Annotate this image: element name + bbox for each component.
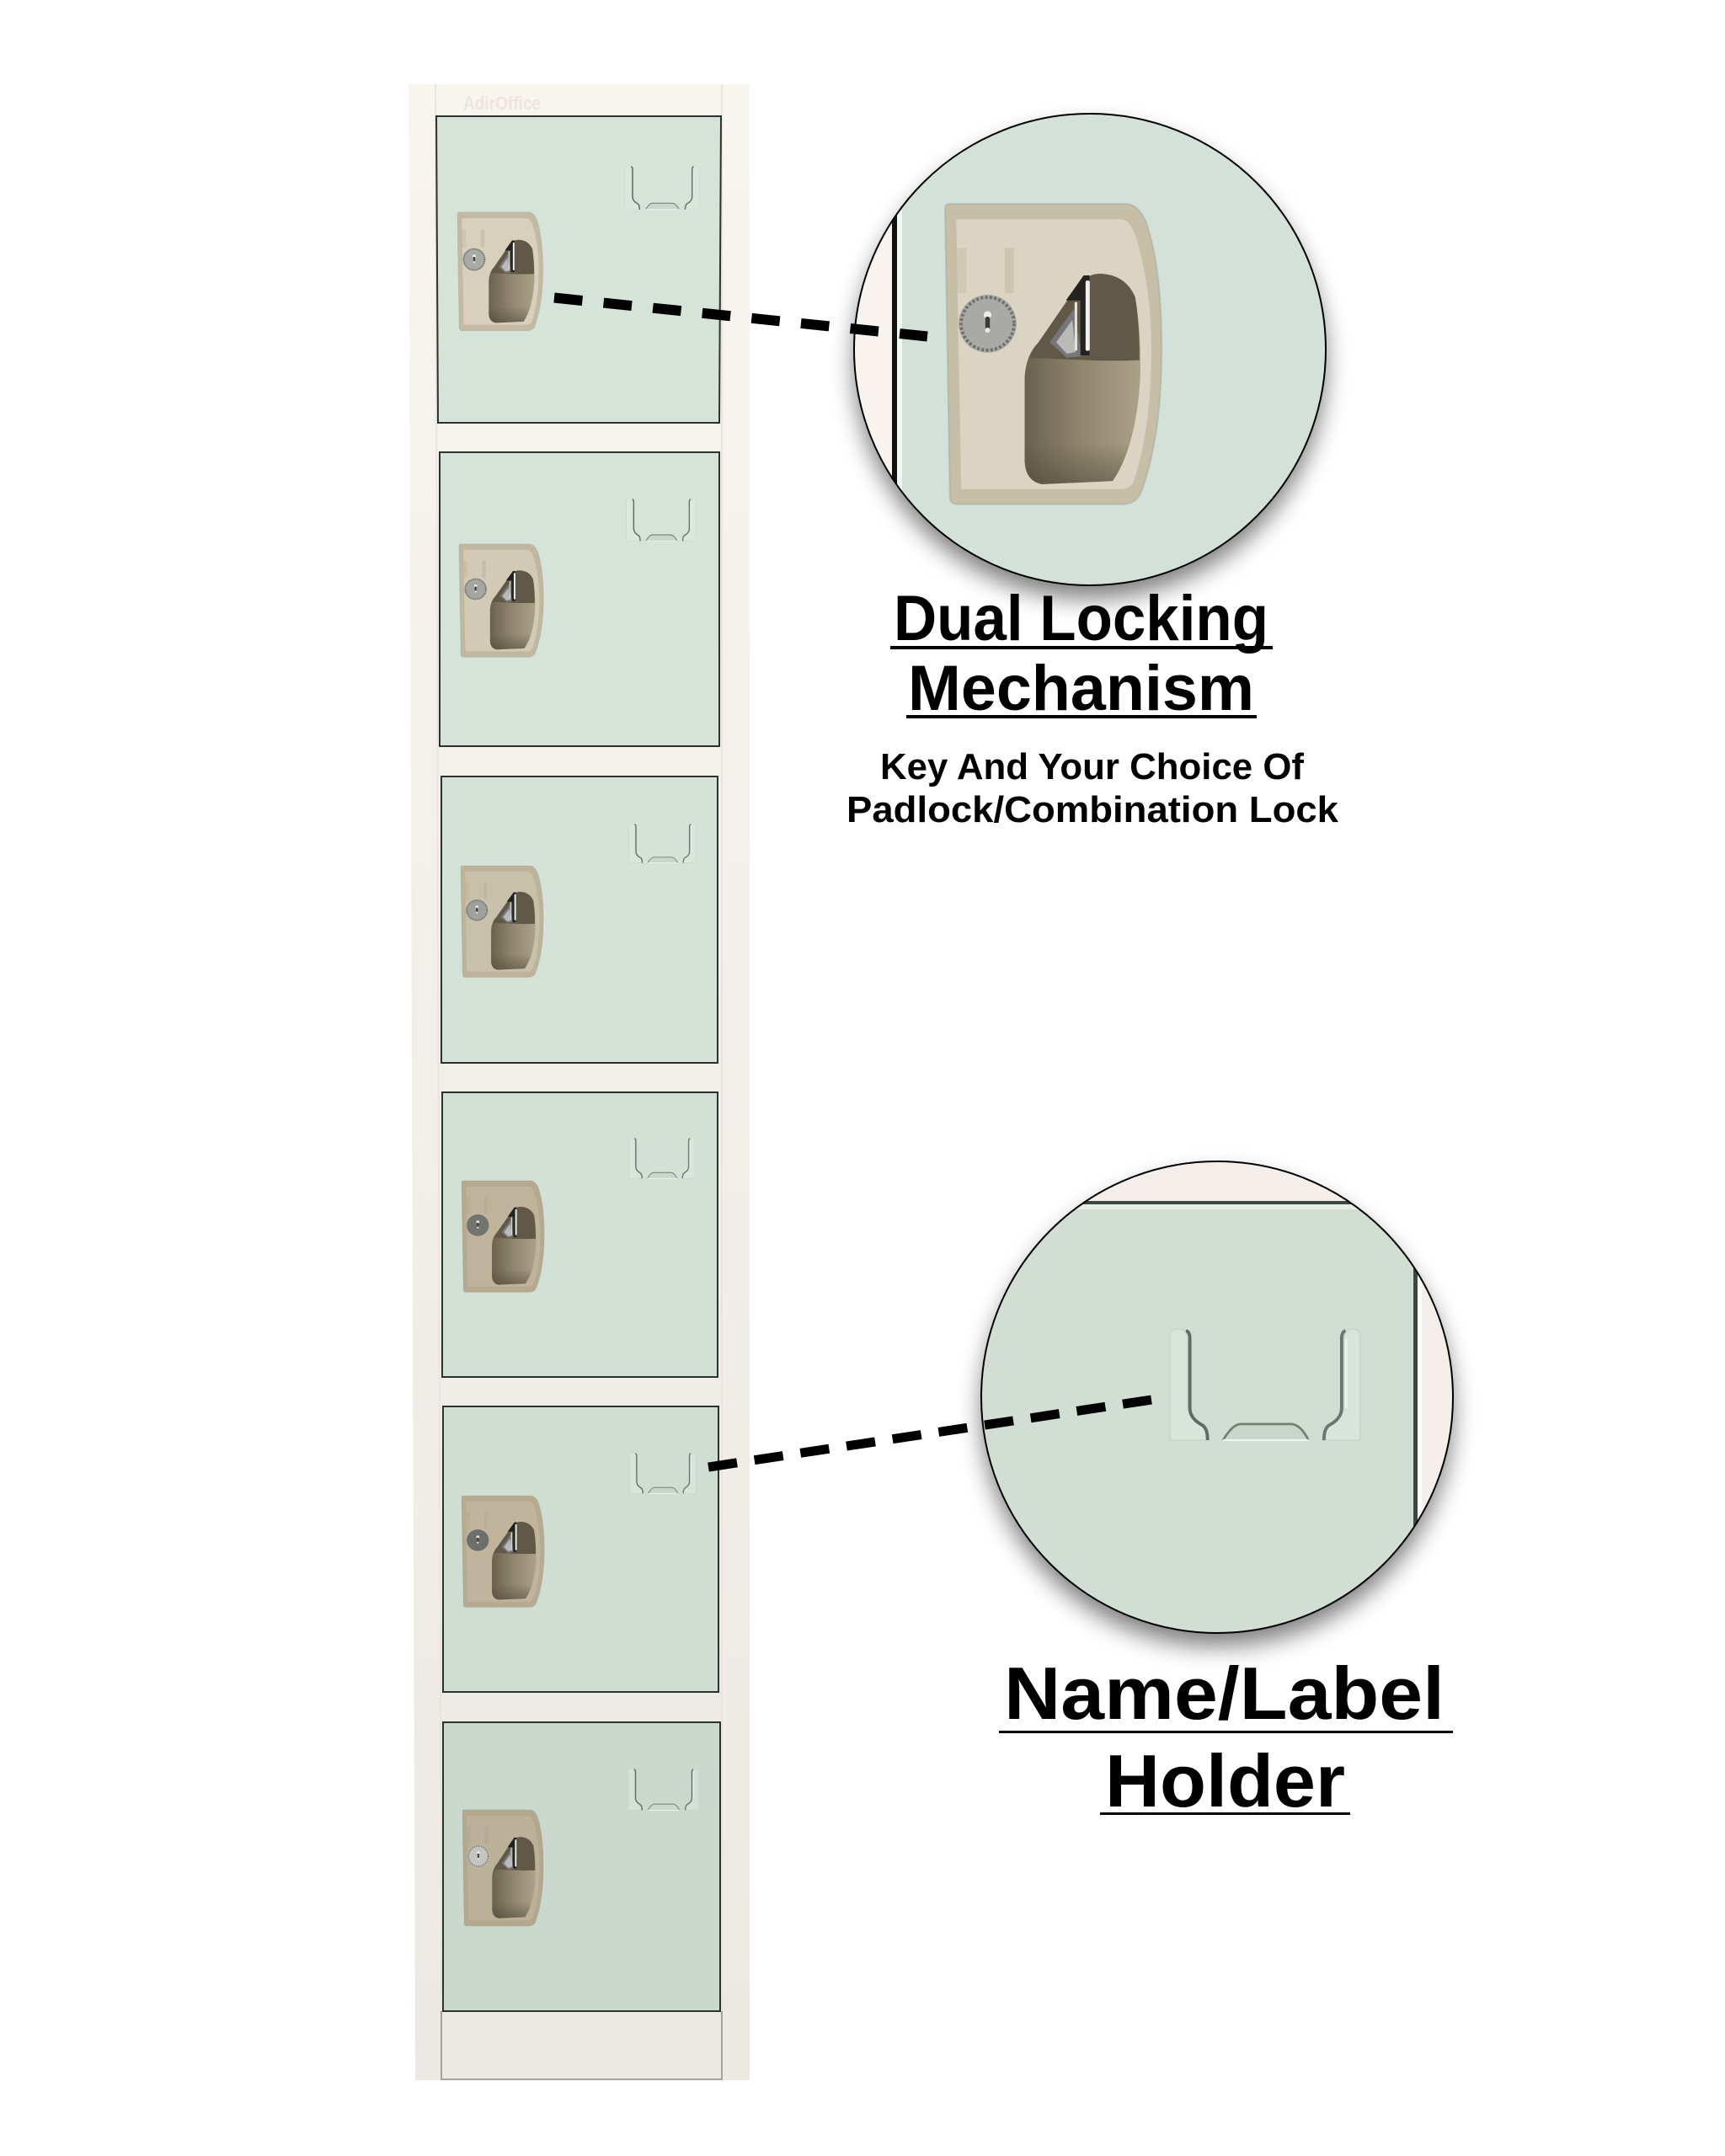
circle: label holder detail magnified xyxy=(969,1154,1481,1659)
text: lock description xyxy=(846,746,1339,830)
door 4 xyxy=(442,1092,718,1377)
door 1 xyxy=(436,116,721,423)
locker frame xyxy=(409,84,750,2080)
door 6 xyxy=(443,1722,720,2011)
locker cabinet xyxy=(409,84,750,2080)
brand mark: AdirOffice xyxy=(463,93,541,114)
heading: name/label holder xyxy=(999,1652,1453,1822)
door 5 xyxy=(443,1406,718,1692)
heading: name/label holder: Holder xyxy=(1105,1739,1345,1822)
text: lock description: Padlock/Combination Lock xyxy=(846,789,1339,830)
heading: name/label holder: Name/Label xyxy=(1004,1652,1445,1735)
circle: lock detail magnified xyxy=(842,101,1348,606)
arrow: dashed leader to lock detail xyxy=(554,298,927,337)
heading: dual locking mechanism: Mechanism xyxy=(908,653,1254,724)
heading: dual locking mechanism xyxy=(890,583,1273,724)
door 3 xyxy=(441,776,718,1063)
text: lock description: Key And Your Choice Of xyxy=(880,746,1304,787)
arrow: dashed leader to label holder detail xyxy=(708,1400,1151,1467)
door 2 xyxy=(440,452,719,746)
heading: dual locking mechanism: Dual Locking xyxy=(894,583,1268,654)
